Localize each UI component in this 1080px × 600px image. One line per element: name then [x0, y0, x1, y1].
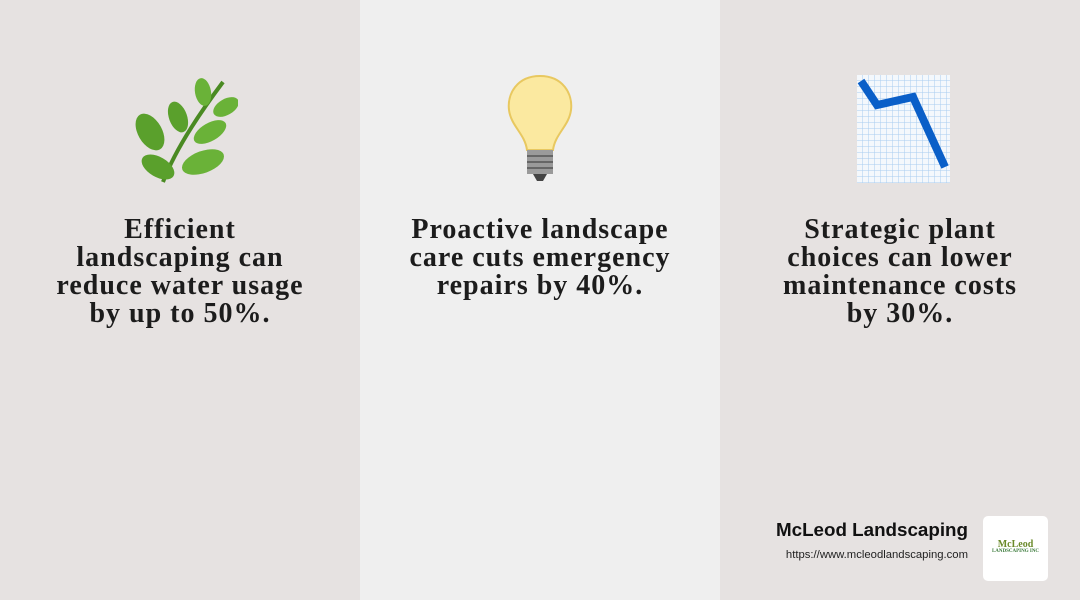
icon: light bulb — [508, 75, 572, 181]
brand url: https://www.mcleodlandscaping.com — [786, 549, 968, 561]
text: maintenance stat: Strategic plant choices can lower maintenance costs by 30%. — [783, 214, 1017, 329]
logo — [983, 516, 1048, 581]
logo: LANDSCAPING INC — [992, 549, 1039, 554]
panel: repairs — [360, 0, 720, 600]
icon: leaf — [136, 78, 238, 183]
text: repairs stat: Proactive landscape care cuts emergency repairs by 40%. — [409, 214, 671, 301]
brand name: McLeod Landscaping — [776, 519, 968, 540]
text: water stat: Efficient — [124, 214, 236, 245]
brand block — [776, 516, 1048, 581]
icon: chart decreasing — [857, 75, 950, 183]
panel: water — [0, 0, 360, 600]
logo: McLeod — [998, 539, 1033, 550]
text: water stat: landscaping can reduce water usage by up to 50%. — [56, 242, 304, 329]
panel: maintenance — [720, 0, 1080, 600]
